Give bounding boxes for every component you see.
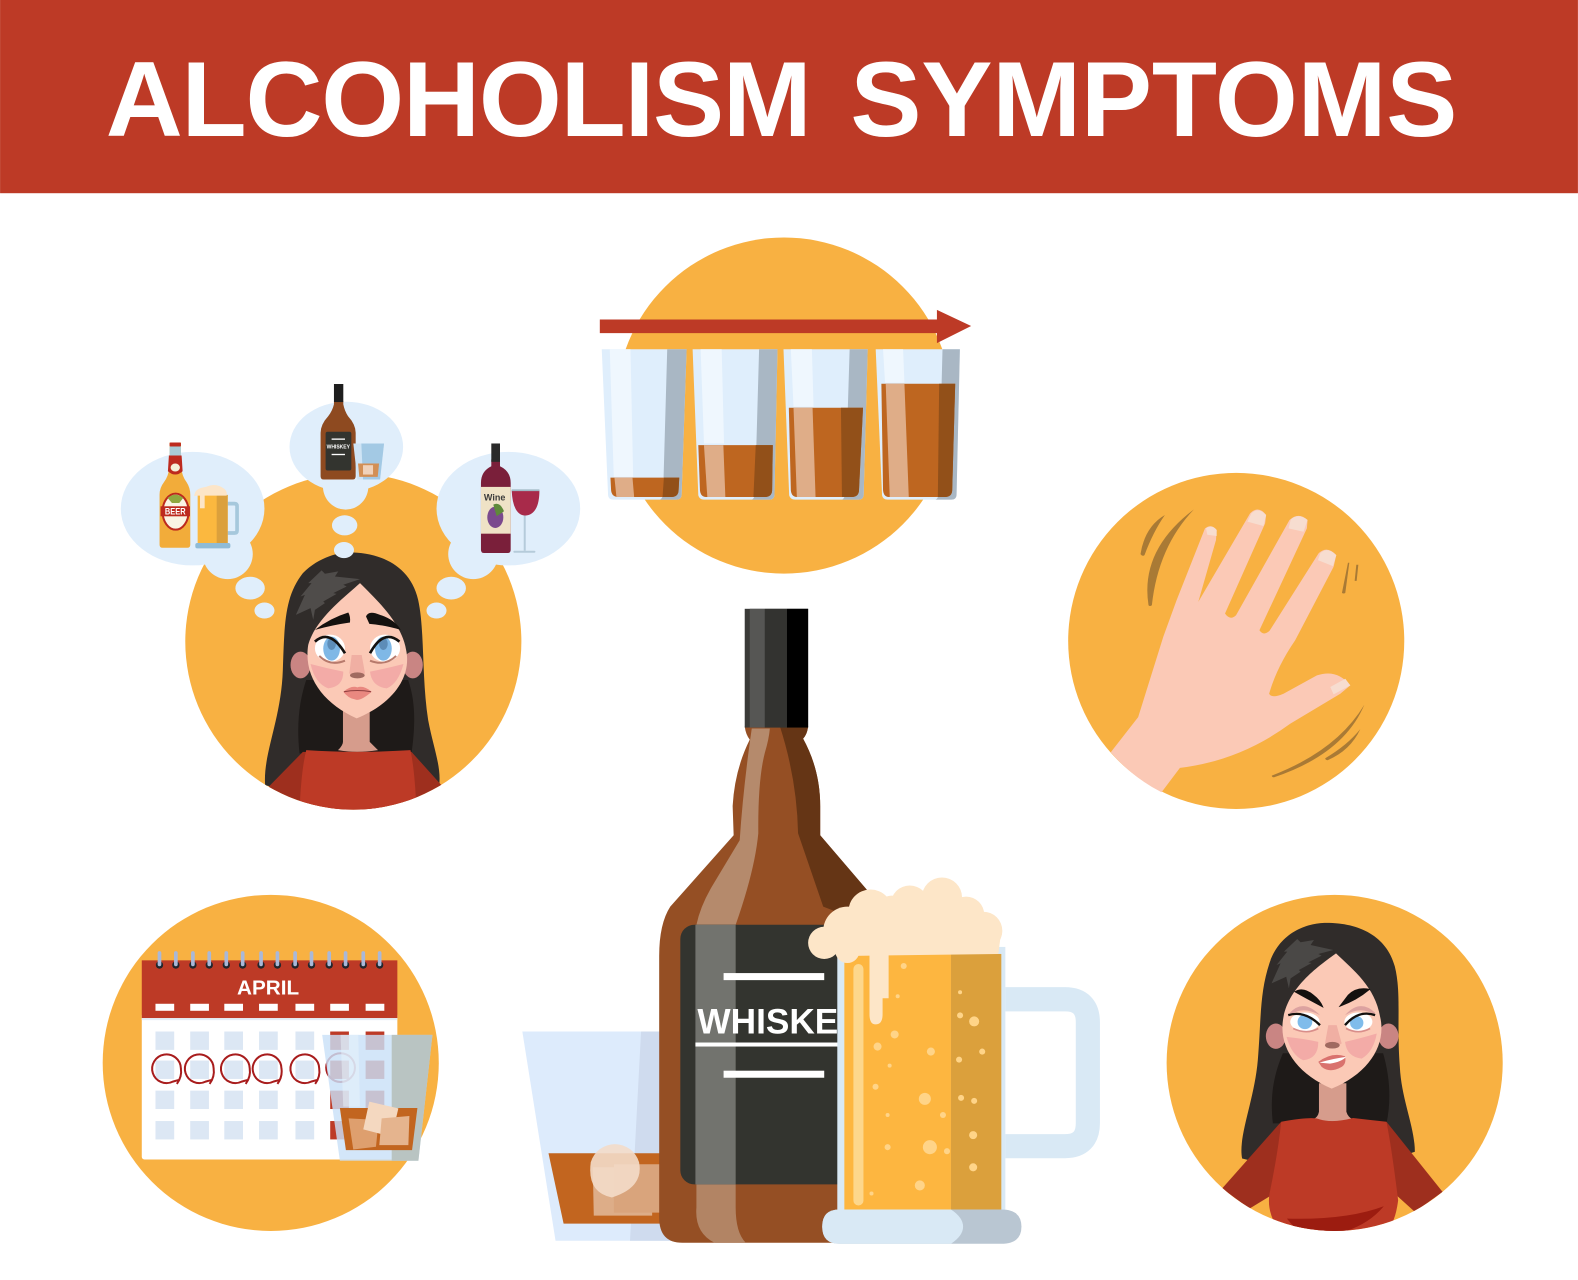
woman looking worried (265, 552, 442, 814)
label: wine: Wine (484, 492, 505, 502)
glass 3 (783, 349, 868, 500)
orange circle background (616, 237, 952, 574)
orange circle background (1068, 473, 1404, 809)
panel: increasing tolerance (600, 237, 971, 574)
orange circle background (185, 474, 521, 810)
label: beer: BEER (165, 507, 186, 517)
label text: WHISKEY (697, 1002, 862, 1041)
whiskey tumbler (522, 1031, 684, 1241)
whiskey glass (322, 1035, 432, 1161)
arrow (600, 310, 971, 343)
foam (808, 877, 1002, 1024)
header banner (0, 0, 1578, 193)
panel: craving thoughts of alcohol (121, 384, 580, 814)
whiskey bottle (659, 609, 886, 1243)
label: whiskey: WHISKEY (327, 444, 350, 450)
bottle label (680, 925, 882, 1184)
orange circle background (103, 895, 439, 1231)
title: ALCOHOLISM (106, 39, 811, 159)
thought bubble: beer (121, 442, 274, 619)
four glasses (602, 349, 960, 500)
orange circle background (1167, 895, 1503, 1231)
bubbles (870, 963, 985, 1195)
title: SYMPTOMS (850, 39, 1457, 159)
glass 2 (693, 349, 777, 500)
spiral rings (156, 953, 383, 969)
glass 1 (602, 349, 687, 500)
thought bubble: whiskey (290, 384, 403, 558)
weekday dashes (155, 1004, 384, 1011)
month label: APRIL (237, 977, 299, 1000)
circled days (152, 1053, 355, 1084)
calendar (142, 953, 397, 1159)
panel: drinking every day calendar (103, 895, 439, 1231)
angry woman (1222, 923, 1443, 1234)
beer mug (808, 877, 1088, 1244)
panel: angry woman (1167, 895, 1503, 1234)
day cells (155, 1032, 314, 1139)
icon: trembling hand (1111, 510, 1350, 792)
bottle cap (745, 609, 808, 728)
glass 4 (876, 349, 960, 500)
motion lines (1141, 509, 1364, 777)
thought bubble: wine (426, 443, 580, 619)
panel: shaking hand (1068, 473, 1404, 809)
centre illustration: whiskey bottle, glass and beer mug (522, 609, 1088, 1244)
